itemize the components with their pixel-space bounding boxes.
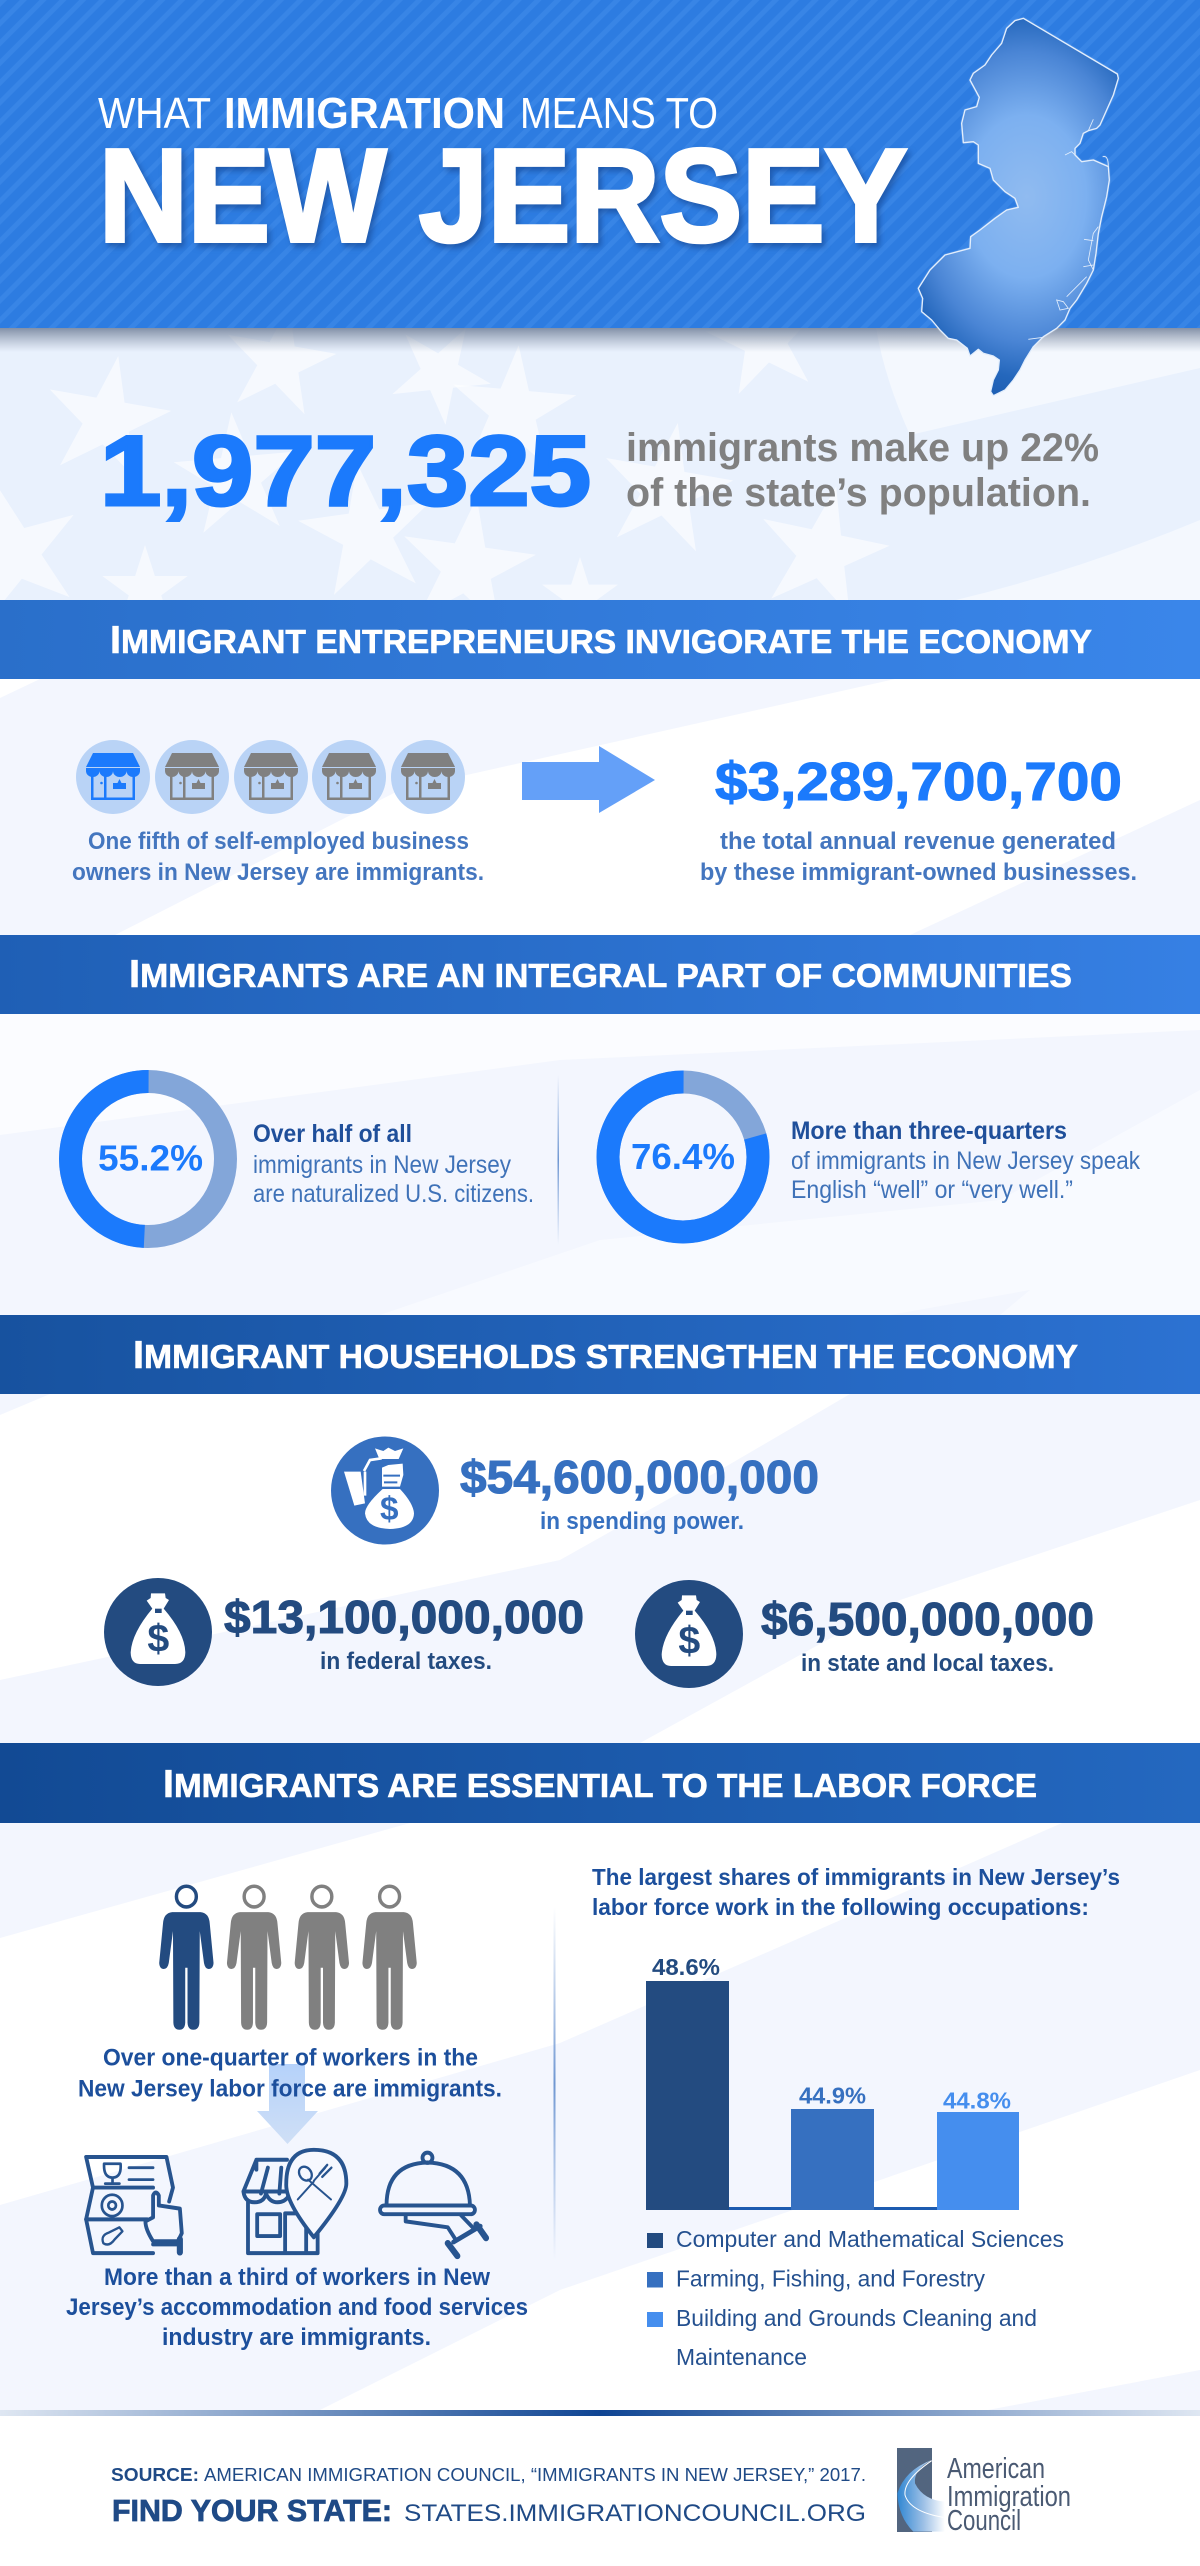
citizens text: immigrants in New Jersey — [253, 1151, 511, 1179]
citizens text: Over half of all — [253, 1120, 412, 1148]
citizens text: are naturalized U.S. citizens. — [253, 1180, 534, 1208]
map: New Jersey — [918, 18, 1118, 396]
statistic description: immigrants make up 22% — [626, 426, 1099, 470]
revenue figure: $3,289,700,700 — [715, 752, 1122, 812]
icon: restaurant location — [243, 2150, 346, 2253]
icon: four workers — [159, 1886, 417, 2030]
food services caption: Jersey’s accommodation and food services — [66, 2294, 528, 2321]
federal taxes figure — [224, 1591, 584, 1675]
workers caption — [78, 2044, 502, 2102]
shop caption — [72, 828, 484, 886]
heading: households: IMMIGRANT HOUSEHOLDS STRENGTHEN THE ECONOMY — [133, 1334, 1078, 1377]
state taxes figure — [761, 1593, 1094, 1677]
bar chart: 44.9% — [799, 2082, 866, 2108]
source line: AMERICAN IMMIGRATION COUNCIL, “IMMIGRANTS IN NEW JERSEY,” 2017. — [204, 2465, 866, 2485]
state taxes figure: $6,500,000,000 — [761, 1593, 1094, 1645]
heading: communities: IMMIGRANTS ARE AN INTEGRAL PART OF COMMUNITIES — [129, 953, 1072, 996]
header band — [0, 0, 1200, 352]
English text — [791, 1117, 1140, 1204]
English text: More than three-quarters — [791, 1117, 1067, 1145]
icon: money bag state: $ — [678, 1619, 700, 1663]
footer: source — [111, 2465, 866, 2528]
legend: Building and Grounds Cleaning and — [676, 2305, 1037, 2331]
logo: American Immigration Council: American — [947, 2453, 1045, 2485]
revenue caption: by these immigrant-owned businesses. — [700, 859, 1137, 886]
heading: labor force: IMMIGRANTS ARE ESSENTIAL TO THE LABOR FORCE — [163, 1763, 1037, 1806]
spending figure — [460, 1451, 819, 1535]
legend: Farming, Fishing, and Forestry — [676, 2266, 985, 2292]
food services caption: More than a third of workers in New — [104, 2264, 490, 2291]
panel: occupations — [592, 1864, 1120, 2370]
spending figure: in spending power. — [540, 1508, 744, 1535]
heading: entrepreneurs: IMMIGRANT ENTREPRENEURS INVIGORATE THE ECONOMY — [110, 619, 1092, 662]
icon: serving cloche — [380, 2153, 486, 2256]
statistic description: of the state’s population. — [626, 471, 1091, 515]
title — [98, 89, 907, 269]
find your state line: STATES.IMMIGRATIONCOUNCIL.ORG — [404, 2500, 866, 2527]
federal taxes figure: $13,100,000,000 — [224, 1591, 584, 1643]
shop caption: owners in New Jersey are immigrants. — [72, 859, 484, 886]
revenue caption: the total annual revenue generated — [720, 828, 1116, 855]
donut chart 76.4% — [608, 1082, 758, 1232]
icon: hand holding money bag — [331, 1436, 439, 1544]
icon: menu — [86, 2157, 182, 2253]
heading: communities — [0, 935, 1200, 1014]
bar chart: 48.6% — [652, 1954, 720, 1980]
donut chart 76.4%: 76.4% — [631, 1136, 735, 1177]
panel: entrepreneurs — [72, 740, 1137, 886]
find your state line — [112, 2493, 866, 2528]
legend — [647, 2226, 1064, 2370]
donut chart 55.2% — [70, 1082, 226, 1236]
spending figure: $54,600,000,000 — [460, 1451, 819, 1503]
English text: of immigrants in New Jersey speak — [791, 1147, 1140, 1175]
icon: money bag state — [635, 1580, 743, 1688]
icon: hand holding money bag: $ — [380, 1491, 399, 1528]
panel: households — [104, 1436, 1094, 1688]
heading: labor force — [0, 1743, 1200, 1823]
find your state line: FIND YOUR STATE: — [112, 2493, 392, 2528]
title line two: NEW — [99, 122, 386, 269]
title line two — [99, 122, 907, 269]
title line one — [98, 89, 718, 138]
icons: five shops — [76, 740, 465, 814]
source line: SOURCE: — [111, 2465, 199, 2485]
workers caption: Over one-quarter of workers in the — [103, 2044, 478, 2072]
heading: entrepreneurs — [0, 600, 1200, 679]
donut chart 55.2%: 55.2% — [98, 1138, 203, 1178]
logo: American Immigration Council — [897, 2448, 1071, 2537]
shop caption: One fifth of self-employed business — [88, 828, 469, 855]
title line two: JERSEY — [419, 122, 907, 269]
arrow right — [522, 746, 655, 813]
legend: Maintenance — [676, 2344, 807, 2370]
legend: Computer and Mathematical Sciences — [676, 2226, 1064, 2252]
federal taxes figure: in federal taxes. — [320, 1648, 492, 1675]
logo: American Immigration Council: Council — [947, 2505, 1021, 2537]
workers caption: New Jersey labor force are immigrants. — [78, 2076, 502, 2102]
logo: American Immigration Council: Immigration — [947, 2481, 1071, 2513]
panel: communities — [70, 1075, 1140, 1245]
English text: English “well” or “very well.” — [791, 1176, 1073, 1204]
revenue caption — [700, 828, 1137, 886]
arrow down — [257, 2064, 318, 2144]
bar chart: 44.8% — [943, 2088, 1011, 2114]
heading: households — [0, 1315, 1200, 1394]
citizens text — [253, 1120, 534, 1208]
food services caption — [66, 2264, 528, 2351]
big number: 1,977,325 — [100, 415, 591, 526]
statistic description — [626, 426, 1099, 515]
occupations heading: labor force work in the following occupations: — [592, 1894, 1089, 1920]
bar chart — [646, 1954, 1019, 2210]
food services caption: industry are immigrants. — [162, 2324, 431, 2351]
panel: labor force left — [66, 1886, 528, 2351]
occupations heading: The largest shares of immigrants in New Jersey’s — [592, 1864, 1120, 1890]
occupations heading — [592, 1864, 1120, 1920]
title line one: IMMIGRATION — [224, 89, 505, 138]
icon: money bag federal — [104, 1578, 212, 1686]
title line one: MEANS TO — [520, 89, 718, 138]
icon: money bag federal: $ — [147, 1617, 169, 1661]
title line one: WHAT — [98, 89, 211, 138]
headline statistic — [100, 415, 1099, 526]
state taxes figure: in state and local taxes. — [801, 1650, 1054, 1677]
